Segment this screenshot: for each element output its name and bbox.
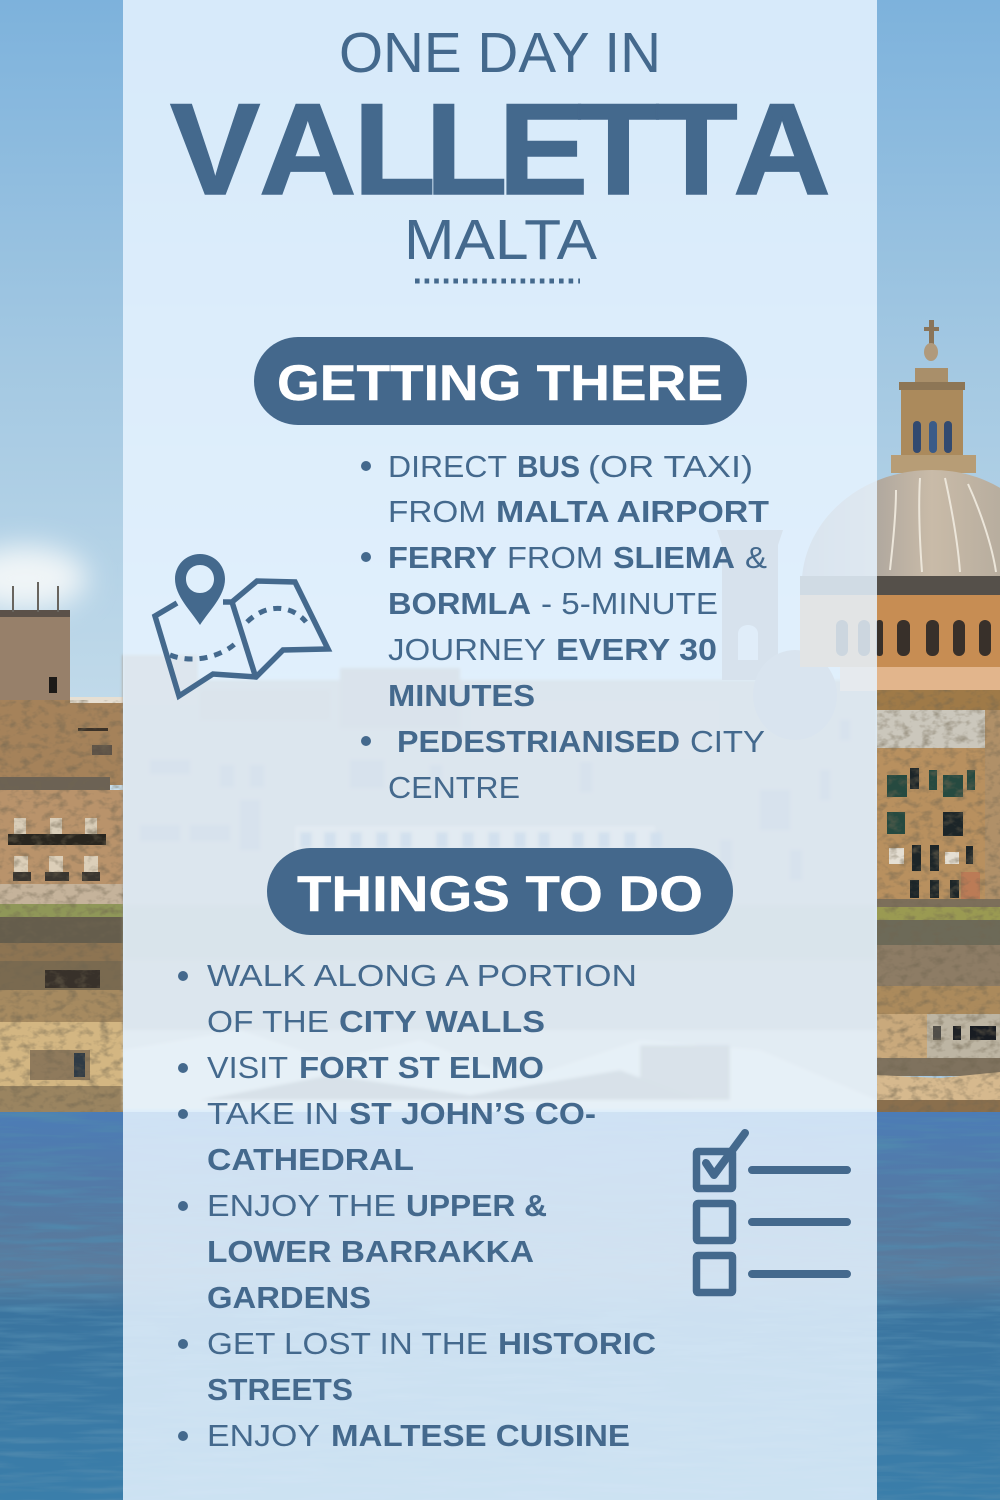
bullet: ferry: - 5-MINUTE (541, 586, 718, 621)
bullet list markers (178, 971, 188, 1441)
bullet: ferry: MINUTES (388, 678, 535, 713)
bullet: fort st elmo: VISIT (207, 1050, 288, 1085)
bullet: ferry: SLIEMA (613, 540, 735, 575)
bullet: historic streets: STREETS (207, 1372, 353, 1407)
bullet: bus from airport: (OR TAXI) (588, 449, 753, 484)
bullet: ferry: FROM (507, 540, 603, 575)
bullet: co-cathedral: TAKE IN (207, 1096, 339, 1131)
heading pill: things to do (267, 848, 733, 935)
bullet: barrakka gardens: UPPER & (406, 1188, 547, 1223)
bullet: barrakka gardens (207, 1188, 547, 1315)
title line: Valletta: VALLETTA (170, 77, 831, 222)
title block (170, 21, 831, 281)
dotted divider (415, 278, 580, 284)
bullet: city walls: CITY WALLS (339, 1004, 545, 1039)
bullet: co-cathedral: CATHEDRAL (207, 1142, 414, 1177)
heading pill: getting there: GETTING THERE (277, 355, 723, 411)
bullet: maltese cuisine (207, 1418, 630, 1453)
bullet: city walls (207, 958, 637, 1039)
bullet: city walls: OF THE (207, 1004, 329, 1039)
bullet: ferry: & (745, 540, 767, 575)
bullet: historic streets: GET LOST IN THE (207, 1326, 488, 1361)
central bell tower and small dome (717, 530, 837, 740)
bullet: pedestrianised: PEDESTRIANISED (397, 724, 680, 759)
bullet: co-cathedral: ST JOHN’S CO- (349, 1096, 596, 1131)
bullet: barrakka gardens: GARDENS (207, 1280, 371, 1315)
stone texture right (877, 690, 1000, 1112)
right buildings (877, 710, 1000, 1112)
central buildings (123, 655, 877, 1110)
cloud (0, 546, 87, 610)
bullet: ferry: FERRY (388, 540, 497, 575)
bullet: maltese cuisine: MALTESE CUISINE (331, 1418, 630, 1453)
bullet: ferry (388, 540, 767, 713)
bullet: bus from airport: MALTA AIRPORT (496, 494, 769, 529)
bullet: barrakka gardens: ENJOY THE (207, 1188, 396, 1223)
bullet: bus from airport: BUS (517, 449, 580, 484)
icon: folded map with location pin (155, 554, 328, 696)
sea (0, 1112, 1000, 1500)
right dome church (800, 320, 1000, 712)
bullet: ferry: EVERY 30 (556, 632, 717, 667)
bullet: ferry: JOURNEY (388, 632, 546, 667)
bullet: bus from airport: DIRECT (388, 449, 507, 484)
bullet: pedestrianised (388, 724, 765, 805)
bullet: historic streets (207, 1326, 656, 1407)
bullet: pedestrianised: CENTRE (388, 770, 520, 805)
bullet: maltese cuisine: ENJOY (207, 1418, 320, 1453)
bullet: bus from airport (388, 449, 769, 529)
bullet: ferry: BORMLA (388, 586, 531, 621)
text block: things to do list (178, 958, 656, 1453)
stone texture on side buildings (0, 700, 123, 1112)
bullet: bus from airport: FROM (388, 494, 486, 529)
left buildings (0, 697, 123, 1112)
bullet: barrakka gardens: LOWER BARRAKKA (207, 1234, 534, 1269)
bullet: pedestrianised: CITY (690, 724, 765, 759)
bullet: city walls: WALK ALONG A PORTION (207, 958, 637, 993)
heading pill: things to do: THINGS TO DO (297, 866, 703, 922)
sky (0, 0, 1000, 800)
left tower (0, 582, 70, 707)
bullet: fort st elmo: FORT ST ELMO (299, 1050, 544, 1085)
bullet: historic streets: HISTORIC (498, 1326, 656, 1361)
bullet list markers (361, 461, 371, 746)
text block: getting there list (361, 449, 769, 805)
title line: Malta: MALTA (404, 208, 597, 272)
icon: checklist (696, 1133, 847, 1292)
bullet: co-cathedral (207, 1096, 596, 1177)
translucent centre panel (123, 0, 877, 1500)
heading pill: getting there (254, 337, 747, 425)
title line: one day in: ONE DAY IN (339, 21, 661, 85)
bullet: fort st elmo (207, 1050, 544, 1085)
